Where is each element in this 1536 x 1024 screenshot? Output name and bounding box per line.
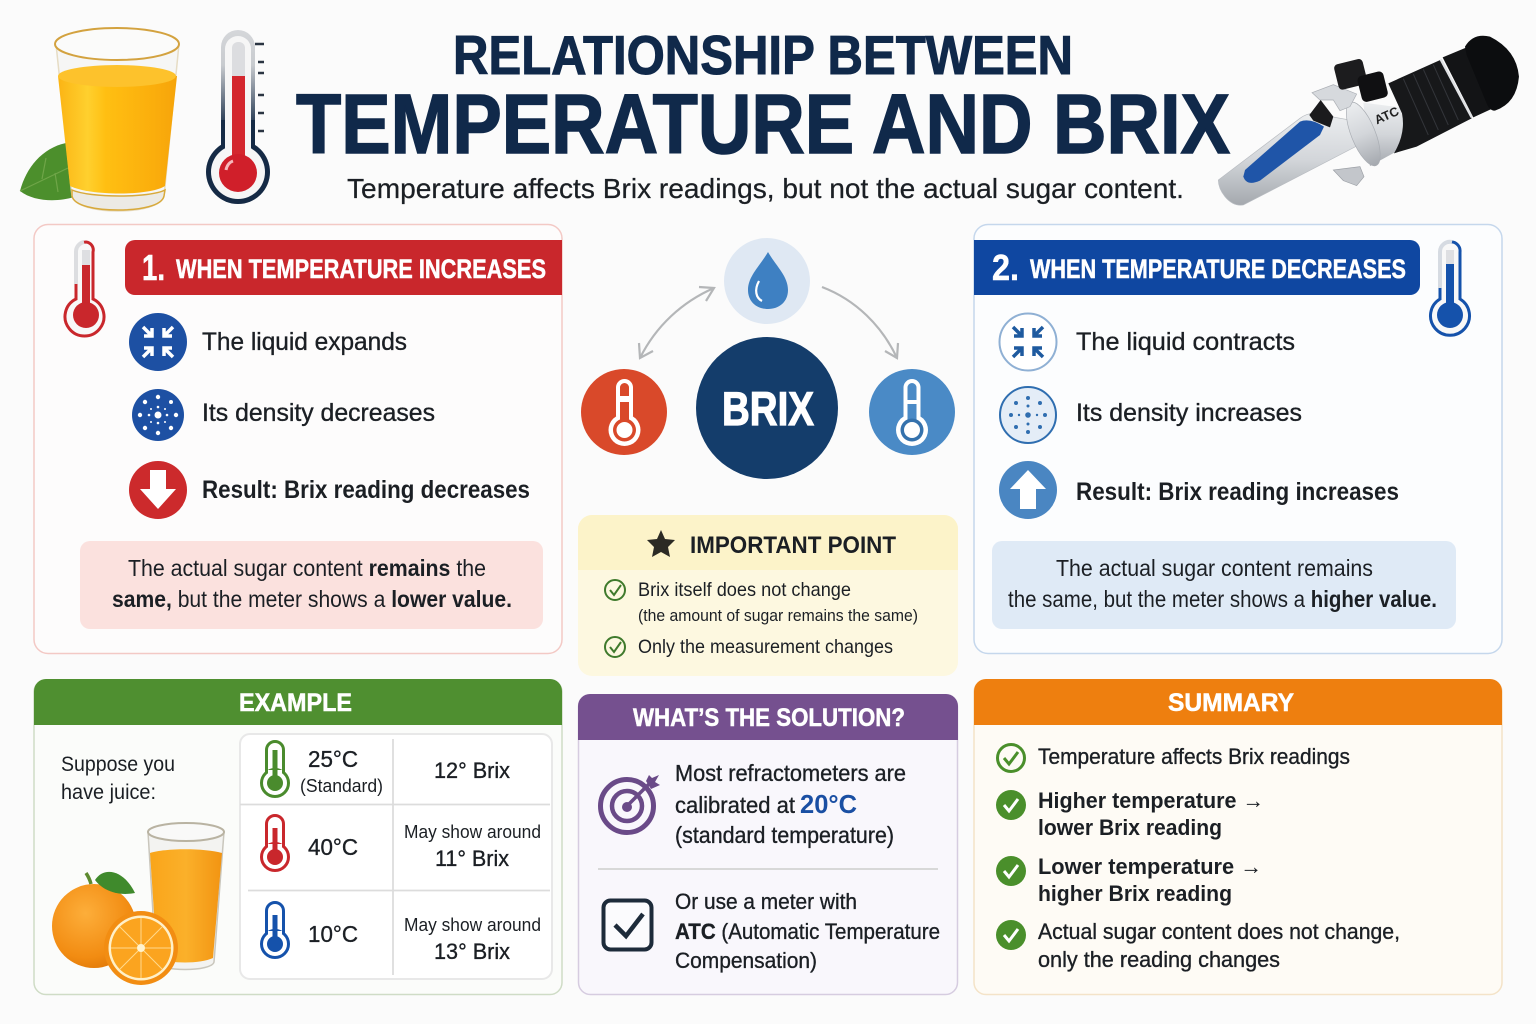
callout: lower value: same, but the meter shows a lower value. (112, 586, 512, 612)
text: its density increases: Its density increases (1076, 399, 1302, 427)
heading: when temperature decreases: 2. (992, 247, 1019, 288)
icon: cold thermometer (869, 369, 955, 455)
icon: sparse dots (132, 389, 184, 441)
icon: filled check (996, 856, 1026, 886)
icon: glass of juice with leaf (20, 28, 179, 211)
title (296, 24, 1230, 171)
text: may show 13° Brix (404, 914, 541, 964)
text: may show 11° Brix (404, 821, 541, 871)
icon: refractometer: ATC (1372, 104, 1401, 127)
heading: what's the solution (578, 694, 958, 740)
text: use ATC meter (675, 889, 940, 973)
text: 25°C standard: (Standard) (300, 776, 383, 796)
heading: when temperature decreases (974, 240, 1420, 295)
icon: star (647, 530, 675, 557)
text: actual sugar unchanged (1038, 919, 1400, 972)
text: brix does not change (638, 579, 918, 625)
text: affects readings: Temperature affects Brix readings (1038, 744, 1350, 769)
callout: higher value (992, 541, 1456, 629)
icon: water drop (724, 238, 810, 324)
text: suppose you have juice: Suppose you (61, 753, 175, 776)
heading: what's the solution: WHAT’S THE SOLUTION? (633, 704, 905, 732)
icon: blue thermometer (1430, 242, 1470, 335)
text: the liquid contracts: The liquid contracts (1076, 328, 1295, 356)
heading: when temperature increases (125, 240, 562, 295)
heading: when temperature increases: WHEN TEMPERATURE INCREASES (176, 254, 546, 284)
text: brix does not change: Brix itself does not change (638, 579, 851, 601)
title: TEMPERATURE AND BRIX (296, 77, 1230, 171)
text: actual sugar unchanged: only the reading changes (1038, 947, 1280, 972)
panel: summary (974, 679, 1502, 994)
icon: blue thermometer (262, 902, 288, 958)
text: measurement changes: Only the measurement changes (638, 636, 893, 658)
icon: target (600, 775, 660, 832)
text: its density decreases: Its density decreases (202, 399, 435, 427)
text: higher temperature (1038, 788, 1264, 840)
callout: lower value: The actual sugar content remains the (128, 555, 486, 581)
callout: higher value: The actual sugar content remains (1056, 555, 1373, 581)
icon: contract arrows (1000, 314, 1056, 370)
brix circle: BRIX (722, 382, 814, 435)
icon: down arrow (129, 461, 187, 519)
text: lower temperature: Lower temperature → (1038, 854, 1262, 879)
text: may show 11° Brix: May show around (404, 821, 541, 842)
callout: lower value (80, 541, 543, 629)
text: calibrated at 20°C: Most refractometers are (675, 760, 906, 786)
text: 12° Brix: 12° Brix (434, 758, 510, 783)
callout: higher value: the same, but the meter shows a higher value. (1008, 586, 1437, 612)
text: lower temperature (1038, 854, 1262, 906)
arrow: liquid to temperature (822, 287, 898, 358)
icon: outline check (998, 744, 1024, 772)
text: actual sugar unchanged: Actual sugar content does not change, (1038, 919, 1400, 944)
text: calibrated at 20°C (675, 760, 906, 848)
text: result decreases: Result: Brix reading decreases (202, 476, 530, 504)
text: suppose you have juice (61, 753, 175, 804)
icon: dense dots (1000, 387, 1056, 443)
text: higher temperature: lower Brix reading (1038, 815, 1222, 840)
title: RELATIONSHIP BETWEEN (453, 24, 1073, 86)
text: calibrated at 20°C: (standard temperature) (675, 822, 894, 848)
icon: filled check (996, 790, 1026, 820)
icon: hot thermometer (581, 369, 667, 455)
heading: important point: IMPORTANT POINT (690, 532, 896, 559)
icon: filled check (996, 920, 1026, 950)
text: use ATC meter: Compensation) (675, 948, 817, 973)
heading: summary: SUMMARY (1168, 689, 1294, 717)
text: use ATC meter: ATC (Automatic Temperature (675, 919, 940, 944)
arrow: temperature to liquid (639, 287, 714, 358)
panel: when temperature decreases (974, 224, 1502, 654)
heading: example: EXAMPLE (239, 689, 352, 717)
text: calibrated at 20°C: 20°C (800, 789, 857, 819)
text: may show 13° Brix: 13° Brix (434, 939, 510, 964)
text: 40°C: 40°C (308, 834, 358, 860)
panel: important point (578, 515, 958, 676)
icon: checkbox (604, 900, 652, 950)
panel: what's the solution (578, 694, 958, 994)
icon: up arrow (999, 461, 1057, 519)
icon: expand arrows (129, 313, 187, 371)
text: use ATC meter: Or use a meter with (675, 889, 857, 914)
icon: large red thermometer (206, 30, 270, 204)
text: 10°C: 10°C (308, 921, 358, 947)
text: 25°C standard (300, 746, 383, 796)
panel: example (34, 679, 562, 994)
heading: example (34, 679, 562, 725)
icon: juice glass and oranges (52, 823, 224, 985)
text: result increases: Result: Brix reading increases (1076, 478, 1399, 506)
panel: when temperature increases (34, 224, 562, 654)
text: brix does not change: (the amount of sugar remains the same) (638, 606, 918, 625)
table: temperature and brix (240, 734, 552, 979)
heading: when temperature decreases: WHEN TEMPERATURE DECREASES (1030, 254, 1406, 284)
icon: check (605, 580, 625, 600)
diagram: brix relationship (581, 238, 955, 479)
text: lower temperature: higher Brix reading (1038, 881, 1232, 906)
text: higher temperature: Higher temperature → (1038, 788, 1264, 813)
text: suppose you have juice: have juice: (61, 781, 156, 804)
text: 25°C standard: 25°C (308, 746, 358, 772)
icon: green thermometer (262, 742, 288, 796)
text: the liquid expands: The liquid expands (202, 328, 407, 356)
icon: red thermometer (262, 816, 288, 870)
heading: when temperature increases: 1. (142, 247, 165, 288)
icon: refractometer (1218, 36, 1519, 205)
text: may show 13° Brix: May show around (404, 914, 541, 935)
heading: summary (974, 679, 1502, 725)
icon: check (605, 637, 625, 657)
text: may show 11° Brix: 11° Brix (435, 846, 509, 871)
brix circle (696, 337, 838, 479)
subtitle: Temperature affects Brix readings, but not the actual sugar content. (347, 173, 1184, 204)
icon: red thermometer (65, 242, 104, 336)
text: calibrated at 20°C: calibrated at (675, 792, 796, 818)
